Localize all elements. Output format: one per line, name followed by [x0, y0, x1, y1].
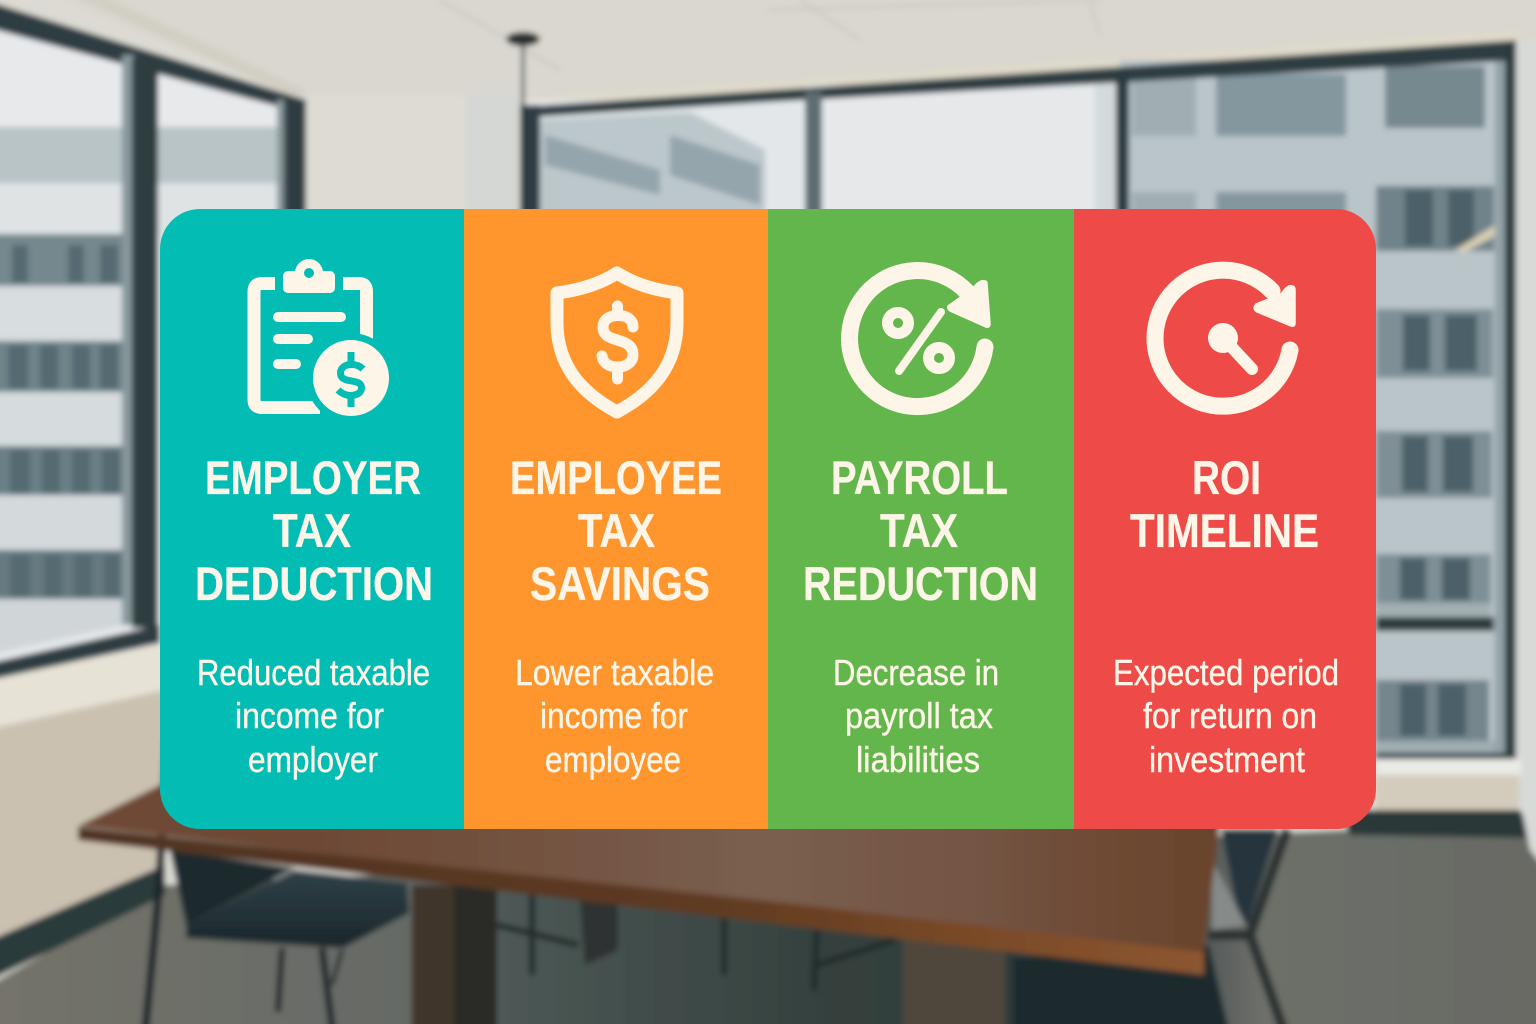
description: employer: Reduced taxable	[197, 652, 430, 693]
right chair	[1013, 945, 1230, 1024]
heading: employee tax savings: TAX	[578, 504, 655, 557]
right windows	[522, 100, 807, 225]
description: employee: Lower taxable	[515, 652, 714, 693]
description: employee: income for	[540, 695, 688, 736]
description: employee: employee	[545, 739, 681, 780]
heading: roi timeline	[1130, 451, 1319, 557]
heading: employee tax savings: EMPLOYEE	[510, 451, 722, 504]
left sill and wall	[0, 643, 165, 729]
icon: clipboard with dollar coin	[254, 259, 396, 423]
description: payroll: liabilities	[856, 739, 980, 780]
icon: shield with dollar	[557, 273, 677, 412]
ceiling	[0, 0, 1536, 105]
description: payroll	[833, 652, 999, 780]
left window	[0, 20, 306, 670]
description: payroll: Decrease in	[833, 652, 999, 693]
floor	[0, 830, 1536, 1024]
heading: payroll tax reduction	[803, 451, 1038, 610]
heading: payroll tax reduction: PAYROLL	[831, 451, 1008, 504]
right wall and sill	[1516, 40, 1536, 870]
column: roi timeline	[1113, 270, 1339, 780]
description: employer: income for	[235, 695, 384, 736]
heading: employee tax savings: SAVINGS	[530, 557, 710, 610]
description: employer	[197, 652, 430, 780]
heading: employer tax deduction: TAX	[273, 504, 351, 557]
description: roi: Expected period	[1113, 652, 1339, 693]
heading: payroll tax reduction: REDUCTION	[803, 557, 1038, 610]
description: payroll: payroll tax	[845, 695, 993, 736]
upper right building	[1132, 78, 1196, 136]
heading: employer tax deduction	[195, 451, 433, 610]
left chair	[170, 850, 295, 925]
heading: employer tax deduction: EMPLOYER	[205, 451, 421, 504]
heading: roi timeline: TIMELINE	[1130, 504, 1319, 557]
description: employer: employer	[248, 739, 378, 780]
column: payroll tax reduction	[803, 271, 1038, 780]
icon: percent in circular arrow	[850, 271, 990, 407]
pendant lamp	[521, 40, 525, 105]
column: employer tax deduction	[195, 259, 433, 780]
panel: four coloured columns	[160, 209, 1376, 829]
heading: payroll tax reduction: TAX	[880, 504, 958, 557]
table	[78, 785, 1219, 952]
heading: roi timeline: ROI	[1192, 451, 1261, 504]
table legs and thin chair legs	[497, 893, 895, 990]
description: roi: for return on	[1143, 695, 1317, 736]
heading: employer tax deduction: DEDUCTION	[195, 557, 433, 610]
right window frames	[520, 40, 1520, 118]
description: employee	[515, 652, 714, 780]
description: roi: investment	[1149, 739, 1305, 780]
right edge building bands	[1376, 186, 1494, 251]
heading: employee tax savings	[510, 451, 722, 610]
left window pane details	[8, 245, 120, 597]
icon: clock with circular arrow	[1155, 270, 1295, 406]
column: employee tax savings	[510, 273, 722, 780]
description: roi	[1113, 652, 1339, 780]
